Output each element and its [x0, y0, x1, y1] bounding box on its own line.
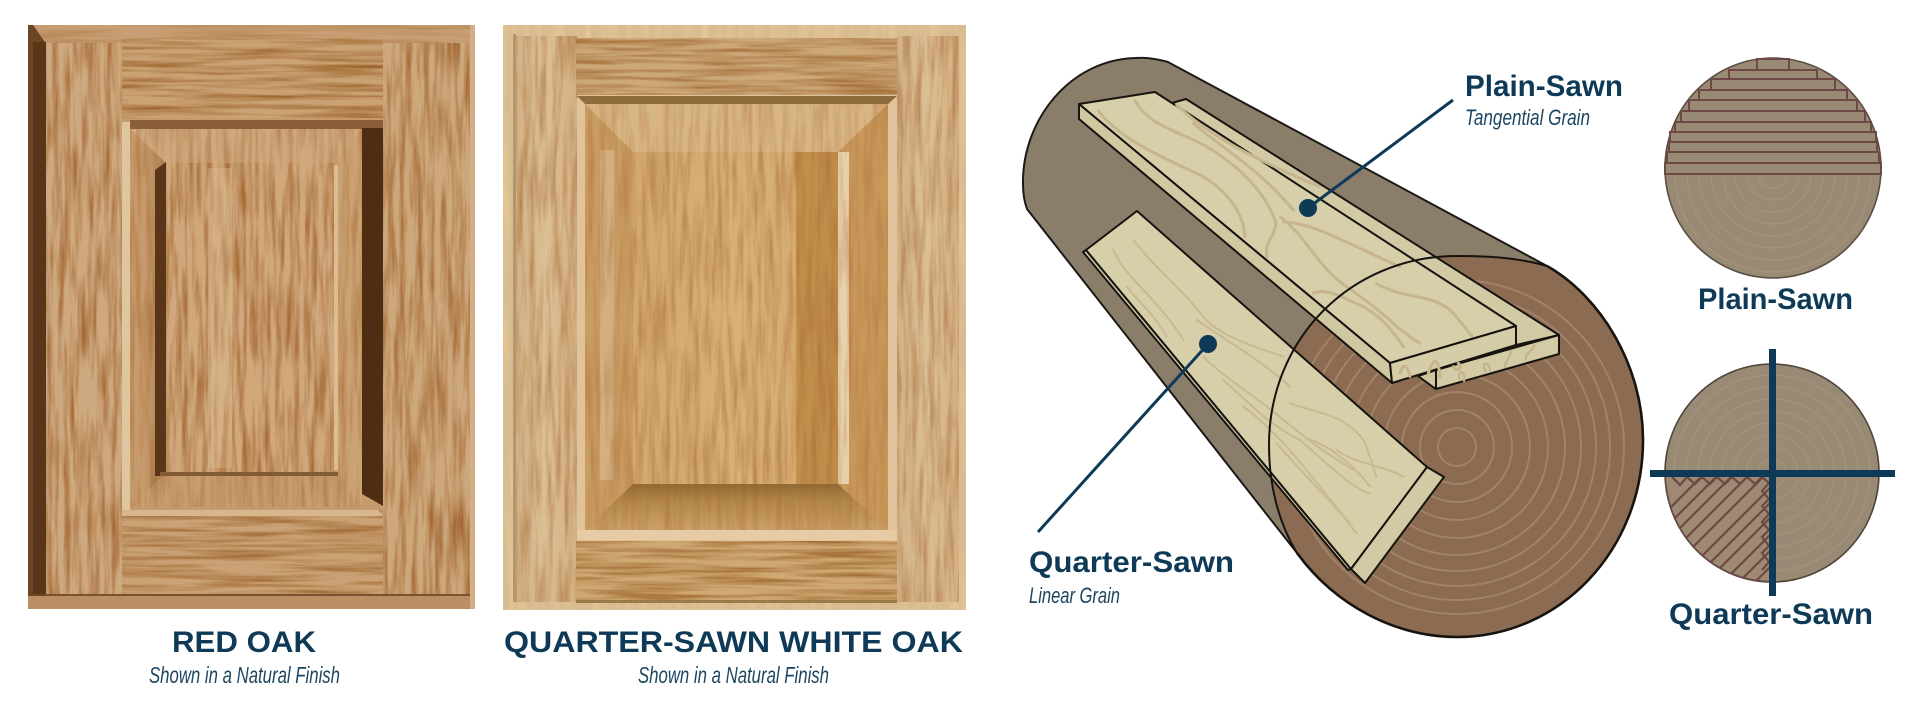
cross cut lines: [1650, 349, 1895, 596]
raised centre: [167, 163, 336, 473]
heading: Quarter-Sawn: [1029, 546, 1234, 579]
recessed panel: [122, 118, 383, 510]
right stile: [383, 43, 470, 594]
bottom rail: [576, 541, 897, 602]
left stile: [516, 36, 577, 602]
bottom rail: [122, 511, 383, 594]
diagram: quarter-sawn cross section: [1650, 349, 1895, 596]
heading: Plain-Sawn: [1465, 70, 1623, 103]
quarter-sawn board: [1083, 211, 1444, 583]
front plain-sawn board: [1079, 92, 1516, 383]
callout line: quarter-sawn: [1038, 335, 1217, 532]
grain lines: [1098, 101, 1472, 377]
top rail: [576, 38, 897, 98]
log circle: [1665, 364, 1879, 582]
recessed panel: [577, 95, 897, 541]
label: plain-sawn tangential grain: [1465, 70, 1623, 130]
panel shadow right: [362, 128, 383, 506]
caption: red oak: [149, 626, 340, 688]
grain lines: [1113, 240, 1403, 533]
growth rings: [1674, 375, 1870, 571]
diagonal boards: [1665, 477, 1769, 582]
heading: quarter-sawn white oak: QUARTER-SAWN WHITE OAK: [504, 626, 963, 659]
subtext: finish: Shown in a Natural Finish: [149, 662, 340, 688]
panel shadow left: [155, 162, 166, 476]
diagram: plain-sawn cross section: [1665, 58, 1881, 278]
end circle outline over boards: [1269, 256, 1547, 553]
diagram: log with sawn boards: [1023, 58, 1643, 637]
label: plain-sawn: Plain-Sawn: [1698, 283, 1853, 316]
caption: quarter-sawn white oak: [504, 626, 963, 688]
log end grain: [1269, 256, 1643, 637]
stacked boards: [1665, 59, 1881, 174]
subtext: finish: Shown in a Natural Finish: [638, 662, 829, 688]
log circle: [1665, 58, 1881, 278]
right stile: [897, 36, 959, 602]
door outer frame: [28, 25, 475, 609]
back plain-sawn board: [1172, 99, 1559, 389]
label: quarter-sawn: Quarter-Sawn: [1669, 598, 1873, 631]
panel: quarter-sawn white oak cabinet door: [503, 25, 966, 610]
subtext: Linear Grain: [1029, 583, 1120, 608]
left stile: [46, 43, 122, 594]
log body: [1023, 58, 1547, 553]
callout line: plain-sawn: [1299, 100, 1453, 217]
top rail: [122, 38, 383, 120]
panel: red oak cabinet door: [28, 25, 475, 609]
heading: red oak: RED OAK: [172, 626, 316, 659]
growth rings: [1675, 174, 1871, 272]
label: quarter-sawn linear grain: [1029, 546, 1234, 608]
raised centre: [633, 152, 838, 484]
subtext: Tangential Grain: [1465, 105, 1590, 130]
door outer frame: [503, 25, 966, 610]
